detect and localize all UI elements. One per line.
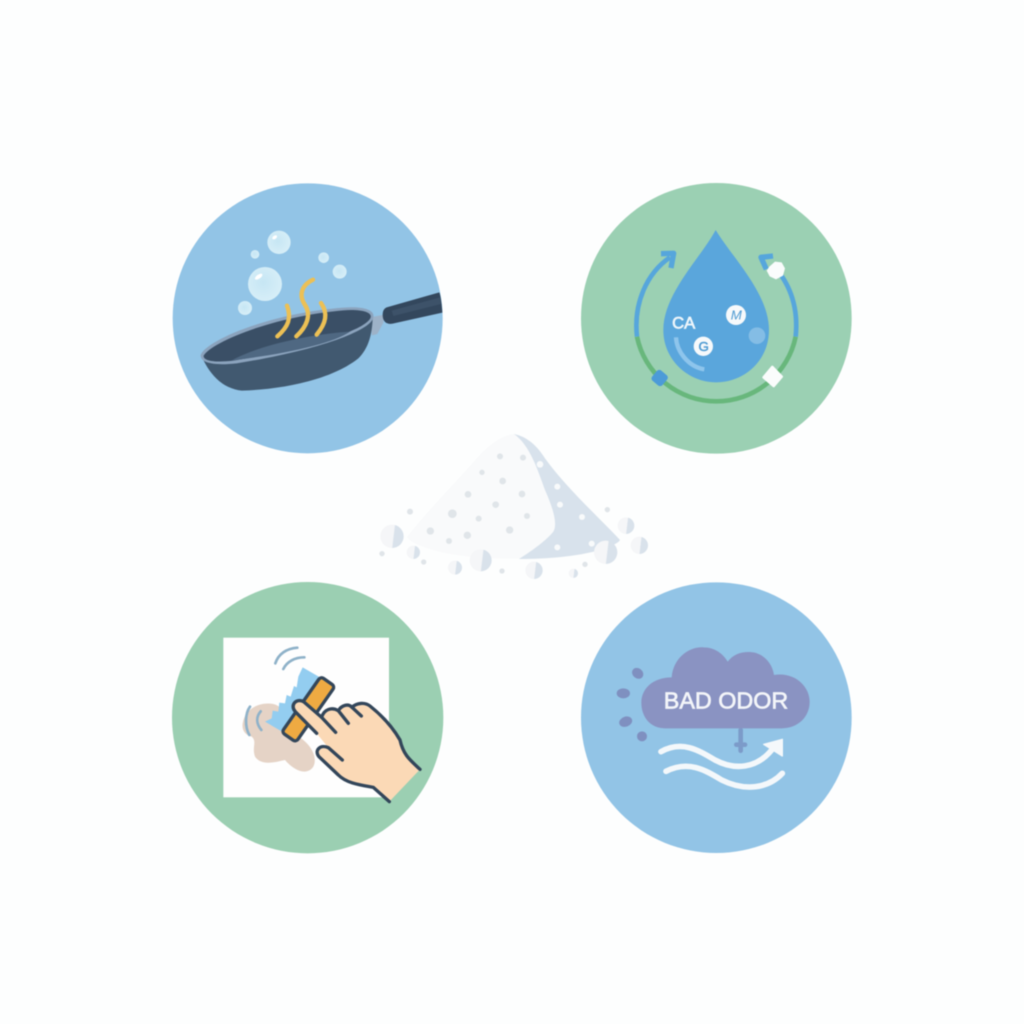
ring nodes (650, 262, 785, 387)
icon: brush bristles (265, 667, 320, 733)
mineral badge: M: M (731, 308, 743, 323)
icon: airflow arrow (661, 739, 782, 787)
mineral badge: G (694, 337, 713, 356)
icon: water drop (663, 230, 769, 382)
icon: bubbles (238, 231, 347, 315)
panel: bad odor cloud and air flow (581, 582, 852, 853)
label: BAD ODOR: BAD ODOR (664, 688, 788, 714)
mineral badge: M (726, 305, 746, 325)
pile speckles (379, 453, 610, 574)
pile white speckles (537, 461, 595, 550)
label: CA: CA (672, 314, 696, 333)
icon: frying pan (201, 307, 373, 391)
motion lines (246, 648, 304, 735)
drop highlights (676, 327, 765, 369)
icon: cloud (641, 647, 810, 728)
cycle ring (636, 253, 796, 401)
stain (242, 704, 315, 772)
icon: pan handle (370, 292, 442, 335)
panel background circle (581, 582, 852, 853)
white square (223, 638, 389, 797)
mineral badge: G: G (698, 339, 709, 354)
loose granules (380, 517, 648, 579)
pile light side (407, 434, 555, 558)
panel background circle (172, 582, 443, 853)
panel: frying pan with steam and bubbles (173, 183, 443, 453)
icon: down arrow (736, 730, 745, 751)
icon: hand (293, 701, 420, 802)
icon: brush handle (282, 677, 335, 742)
panel background circle (581, 183, 852, 454)
pile shaded side (514, 434, 620, 559)
panel background circle (173, 183, 443, 453)
icon: steam (277, 280, 325, 336)
panel: hand scrubbing a stain (172, 582, 443, 853)
central image: baking soda pile (379, 434, 648, 579)
panel: water drop with minerals cycle (581, 183, 852, 454)
icon: odor particles (617, 666, 647, 741)
